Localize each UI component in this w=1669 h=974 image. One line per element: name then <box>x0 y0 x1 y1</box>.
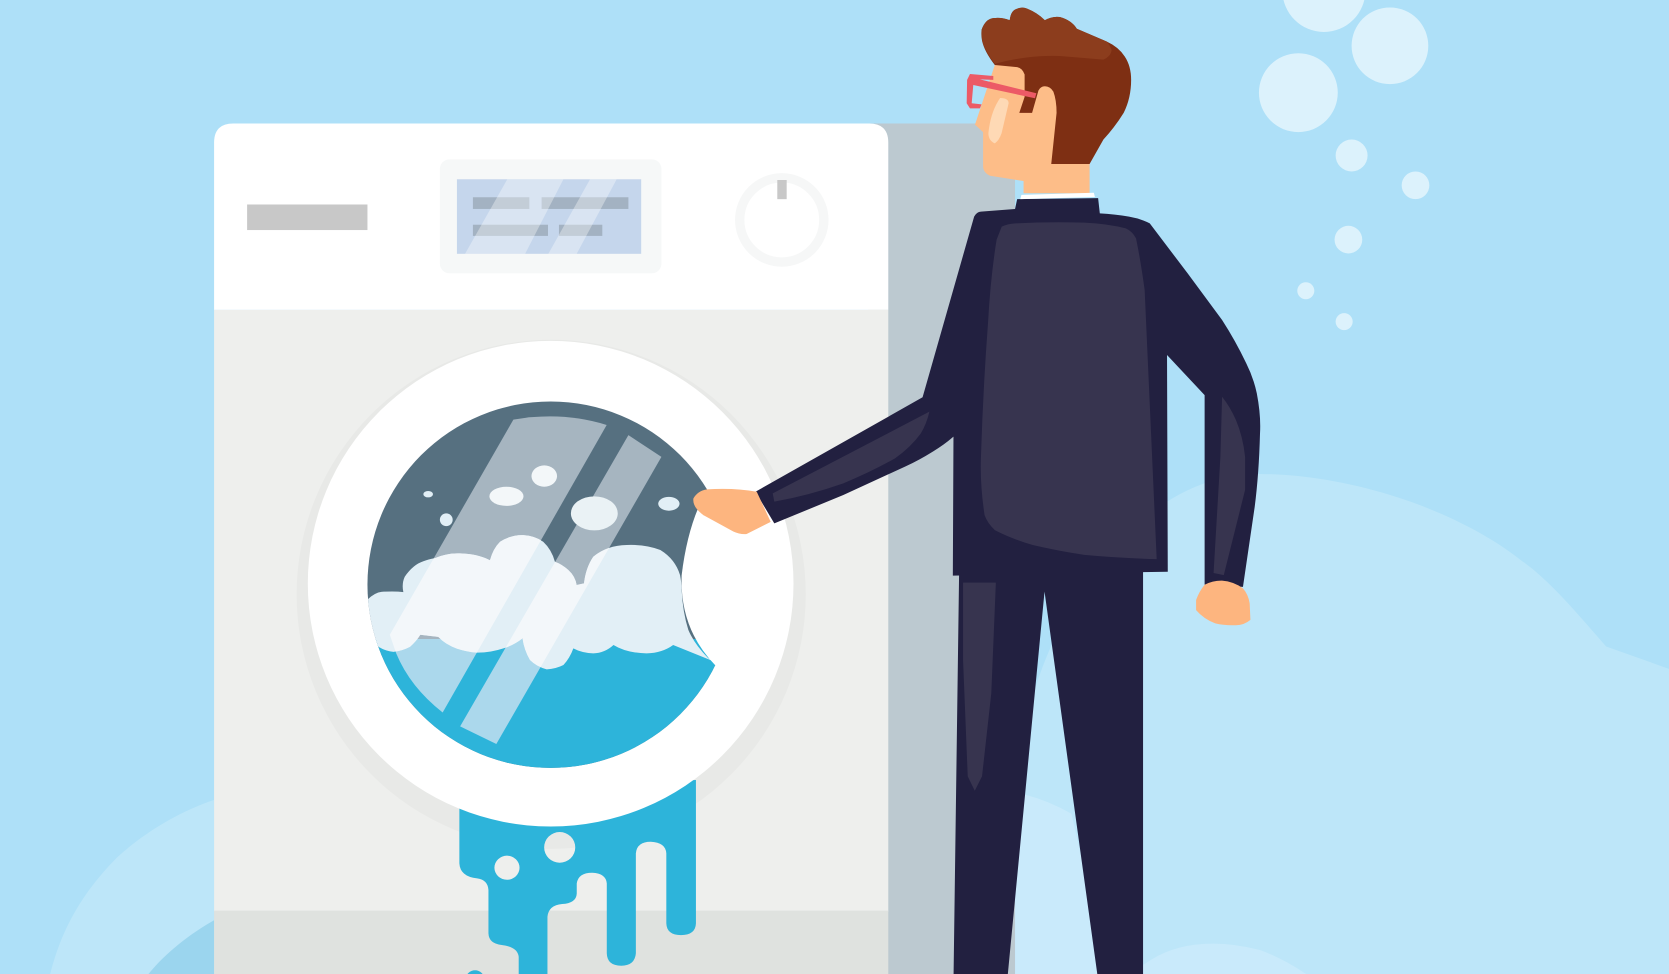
hair <box>982 8 1131 164</box>
vest panel <box>981 222 1157 559</box>
back hand <box>1196 581 1250 625</box>
machine body <box>214 310 888 912</box>
foam <box>368 535 711 670</box>
legs <box>954 564 1143 974</box>
background clouds <box>50 474 1669 974</box>
machine side panel <box>868 124 1015 974</box>
door hand shadow <box>682 488 746 665</box>
front hand <box>693 489 771 534</box>
torso and arms <box>755 198 1260 587</box>
dial <box>740 178 824 262</box>
machine base <box>214 911 888 974</box>
trouser highlight <box>963 583 996 791</box>
lens glare <box>988 98 1009 143</box>
sleeve highlight <box>773 412 929 502</box>
suds <box>423 465 680 530</box>
glass reflections <box>418 416 607 639</box>
dripping water <box>459 780 696 974</box>
back arm highlight <box>1214 397 1245 575</box>
washing machine <box>214 124 1015 974</box>
man <box>693 8 1260 974</box>
glasses <box>967 74 1036 108</box>
machine top panel <box>214 124 888 310</box>
collar <box>1020 193 1095 199</box>
display <box>440 159 661 273</box>
hair highlight <box>981 8 1112 64</box>
bubbles <box>1259 0 1429 330</box>
door window <box>367 402 716 768</box>
detergent label <box>247 204 367 230</box>
door ring <box>297 340 806 849</box>
face and neck <box>975 64 1090 193</box>
door <box>308 341 793 826</box>
